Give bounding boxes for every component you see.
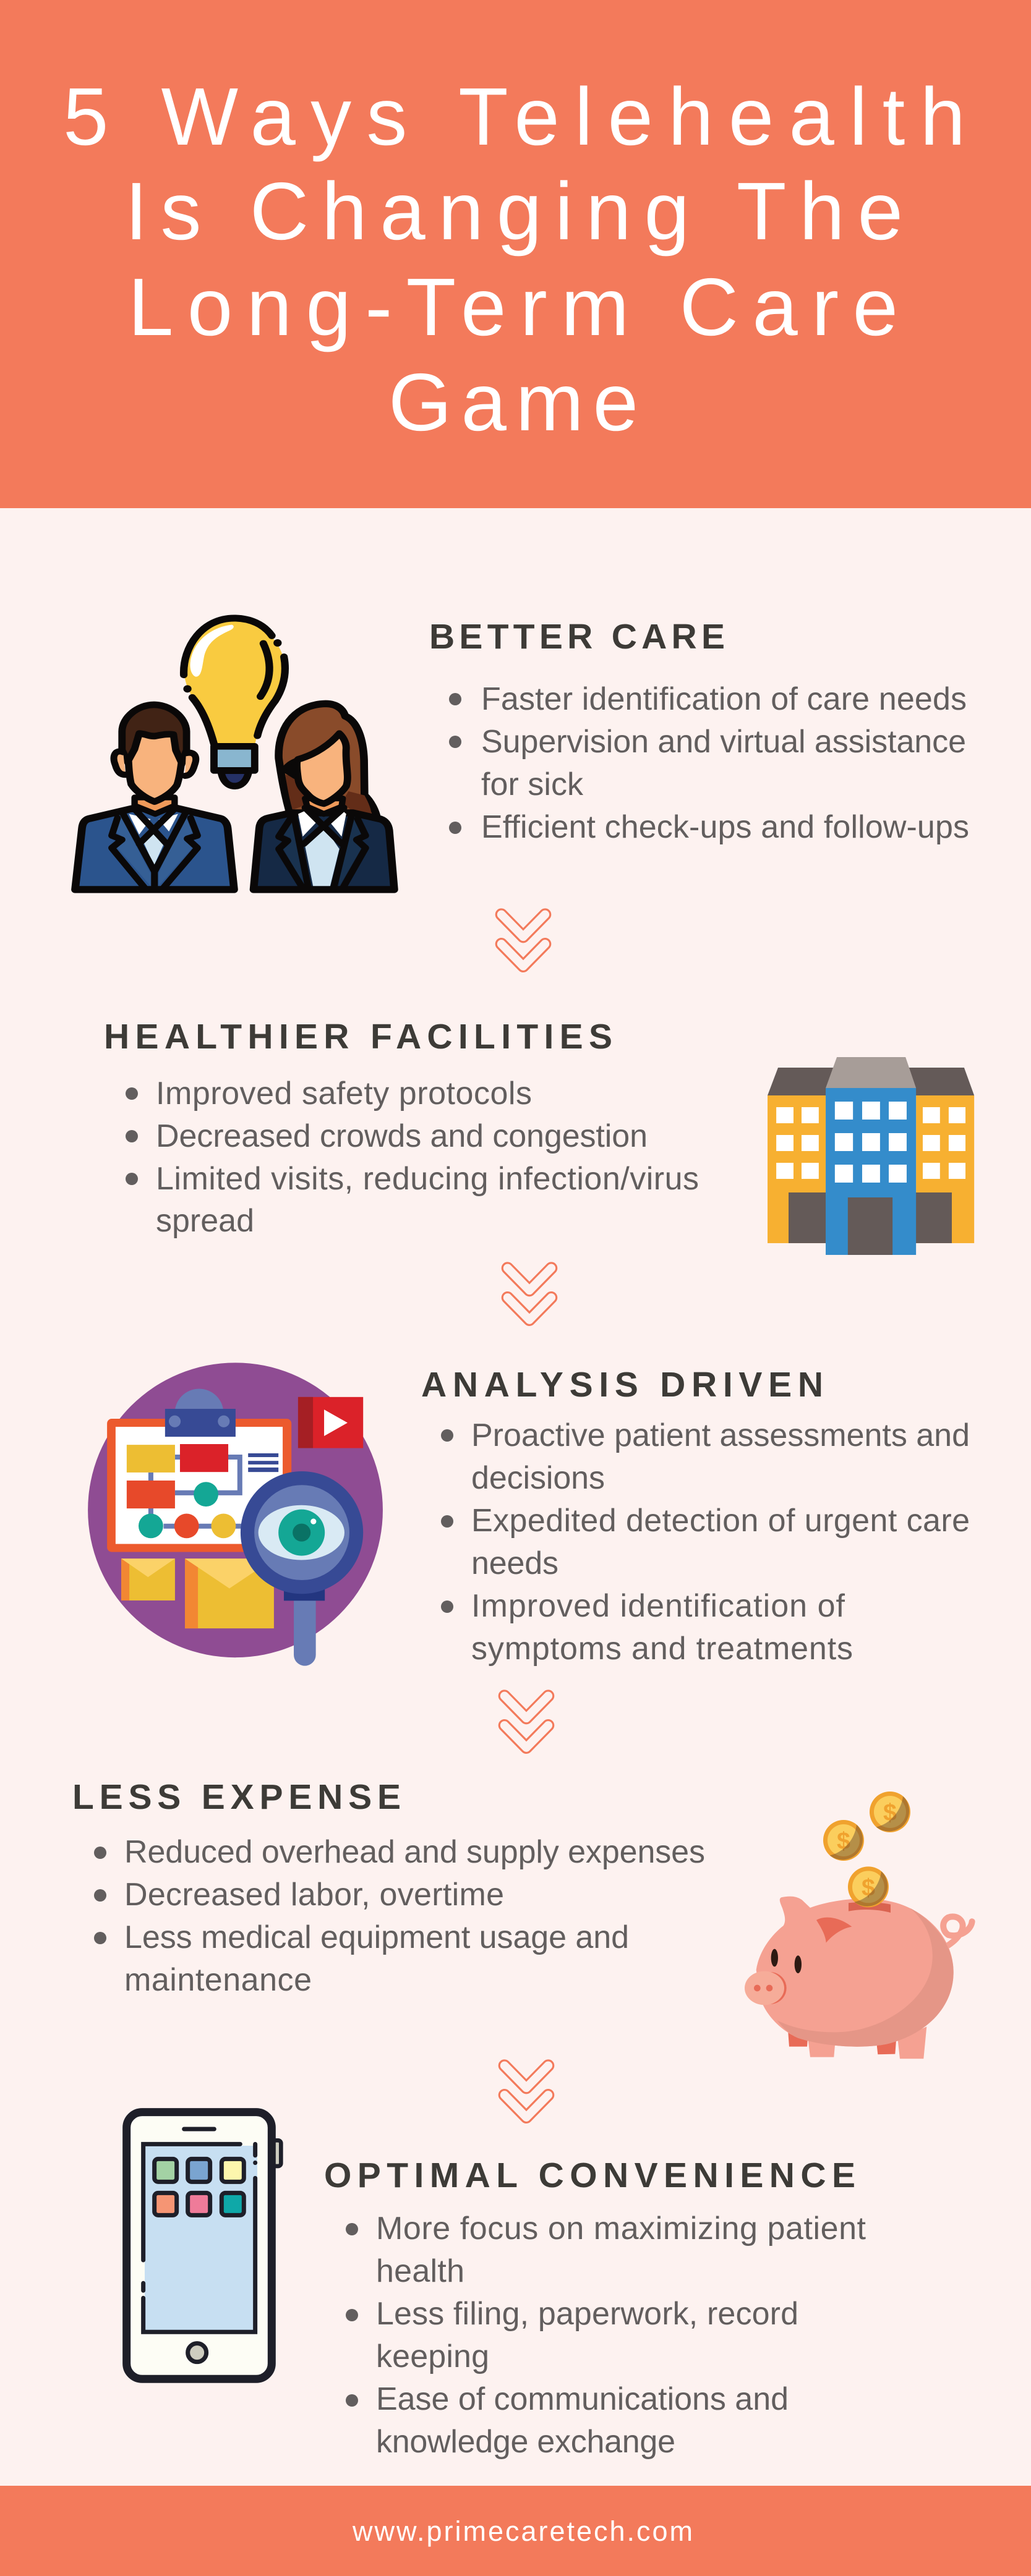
heading: analysis driven: ANALYSIS DRIVEN [421, 1365, 823, 1405]
list: analysis driven: Improved identification of [471, 1588, 845, 1624]
title: Game [388, 357, 638, 448]
heading: optimal convenience: OPTIMAL CONVENIENCE [324, 2156, 855, 2195]
list: optimal convenience: keeping [376, 2339, 489, 2374]
heading: better care: BETTER CARE [429, 617, 725, 657]
panel: less expense [72, 1777, 972, 2059]
panel: optimal convenience [127, 2112, 866, 2460]
title: 5 Ways Telehealth [63, 71, 965, 162]
title: Is Changing The [125, 166, 903, 257]
arrow: double chevron 4 [505, 2065, 548, 2117]
list: healthier facilities: Improved safety protocols [156, 1076, 532, 1112]
list: analysis driven: Proactive patient assessments and [471, 1418, 970, 1453]
list: less expense: Decreased labor, overtime [124, 1877, 504, 1913]
arrow: double chevron 3 [505, 1696, 548, 1748]
heading: less expense: LESS EXPENSE [72, 1777, 401, 1817]
list: healthier facilities: spread [156, 1203, 254, 1239]
list: healthier facilities [126, 1076, 699, 1239]
list: better care: Efficient check-ups and follow-ups [481, 809, 969, 845]
footer website: www.primecaretech.com [352, 2515, 693, 2547]
list: less expense: Less medical equipment usage and [124, 1919, 629, 1955]
panel: analysis driven [88, 1362, 970, 1667]
icon: analytics board with magnifying eye [88, 1362, 383, 1666]
title: Long-Term Care [128, 261, 898, 352]
list: less expense: maintenance [124, 1962, 312, 1998]
list: better care: for sick [481, 767, 584, 802]
list: optimal convenience: health [376, 2253, 464, 2289]
list: optimal convenience: More focus on maximizing patient [376, 2211, 866, 2247]
list: better care: Faster identification of care needs [481, 681, 967, 717]
list: healthier facilities: Limited visits, reducing infection/virus [156, 1161, 699, 1197]
coin: $ [837, 1827, 850, 1855]
icon: smartphone [127, 2112, 281, 2379]
coin: $ [862, 1874, 875, 1901]
panel: better care [75, 617, 969, 890]
coin [823, 1820, 864, 1861]
list: optimal convenience: knowledge exchange [376, 2424, 675, 2460]
arrow: double chevron 1 [502, 914, 545, 966]
list: analysis driven: symptoms and treatments [471, 1631, 853, 1667]
list: optimal convenience: Less filing, paperwork, record [376, 2296, 798, 2332]
list: analysis driven: needs [471, 1545, 558, 1581]
coin [848, 1866, 889, 1907]
list: optimal convenience [346, 2211, 866, 2460]
list: healthier facilities: Decreased crowds and congestion [156, 1118, 648, 1154]
heading: healthier facilities: HEALTHIER FACILITIES [104, 1017, 612, 1056]
list: less expense [94, 1834, 705, 1998]
header banner [0, 0, 1031, 508]
title [63, 71, 965, 448]
woman [254, 704, 394, 890]
coin: $ [883, 1799, 897, 1826]
arrow: double chevron 2 [508, 1268, 551, 1320]
icon: piggy bank with coins [745, 1792, 972, 2059]
man [75, 705, 234, 890]
list: less expense: Reduced overhead and supply expenses [124, 1834, 705, 1870]
icon: hospital building [768, 1057, 974, 1255]
footer banner [0, 2486, 1031, 2576]
panel: healthier facilities [104, 1017, 974, 1255]
list: optimal convenience: Ease of communications and [376, 2381, 789, 2417]
icon: two professionals and a light bulb [75, 618, 394, 890]
coin [870, 1792, 910, 1832]
list: better care [449, 681, 969, 845]
list: analysis driven [441, 1418, 970, 1667]
list: better care: Supervision and virtual assistance [481, 724, 966, 760]
list: analysis driven: decisions [471, 1460, 605, 1496]
list: analysis driven: Expedited detection of urgent care [471, 1503, 970, 1539]
